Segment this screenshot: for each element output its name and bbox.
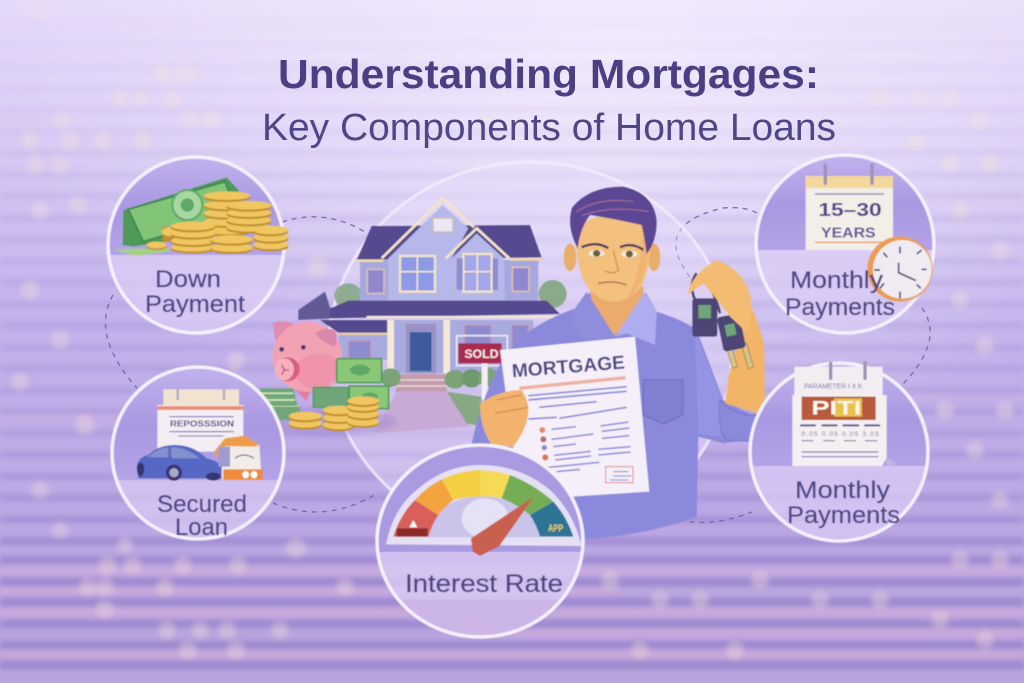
central circle (328, 162, 732, 542)
shop box (222, 436, 262, 479)
sold sign (457, 336, 507, 400)
gauge: APP (548, 524, 564, 535)
icon: PITI calendar (792, 363, 897, 466)
piggy bank and savings (257, 321, 397, 435)
hair (570, 187, 657, 254)
icon: PITI calendar: PARAMETER I 4 K (804, 381, 862, 390)
shirt (472, 293, 758, 539)
hand holding document (480, 390, 528, 447)
panel: Monthly Payments PITI (745, 360, 935, 541)
gauge (386, 465, 582, 556)
dashed connector arcs (105, 208, 930, 522)
circle (112, 367, 284, 539)
mortgage document (500, 337, 649, 500)
circle (756, 155, 934, 333)
panel: Monthly Payments PITI: Payments (787, 502, 900, 529)
circle (108, 157, 284, 333)
label: Down (155, 266, 221, 293)
mortgage document: MORTGAGE (511, 352, 626, 382)
panel: Down Payment (100, 150, 290, 333)
panel: Interest Rate (370, 440, 590, 640)
panel: Monthly Payments term (750, 150, 940, 333)
title: Understanding Mortgages: (278, 51, 819, 97)
icon: repossession notice, car and shop (137, 387, 263, 481)
label: Interest Rate (405, 570, 563, 598)
icon: cash and coins (113, 177, 288, 256)
rolled sleeve (719, 400, 767, 442)
needle (471, 497, 534, 556)
panel: Monthly Payments term: Payments (785, 294, 895, 321)
icon: calendar 15-30 years and clock: YEARS (821, 225, 876, 241)
neck (590, 287, 644, 336)
car (137, 445, 224, 478)
panel: central scene (257, 162, 767, 542)
icon: repossession notice, car and shop: REPOSSSION (170, 420, 234, 429)
man holding mortgage document and keys (472, 187, 767, 539)
subtitle: Key Components of Home Loans (262, 107, 836, 149)
ears and face (564, 243, 576, 271)
sold sign: SOLD (464, 347, 499, 361)
house (298, 198, 567, 433)
icon: calendar 15-30 years and clock: 15–30 (818, 199, 882, 220)
raised forearm (725, 310, 765, 415)
panel: Secured Loan (100, 360, 290, 541)
panel: Secured Loan: Loan (175, 514, 228, 541)
collar (572, 292, 615, 345)
panel: Down Payment: Payment (145, 291, 245, 318)
icon: PITI calendar: 0.05 0.05 0.05 3.05 (801, 431, 879, 438)
icon: calendar 15-30 years and clock (806, 165, 933, 302)
circle (750, 363, 928, 541)
icon: PITI calendar: PITI (811, 398, 861, 419)
label: Monthly (795, 477, 891, 504)
label: Secured (157, 491, 247, 518)
label: Monthly (790, 267, 884, 294)
circle (377, 445, 583, 637)
raised hand (687, 260, 751, 332)
facial features (582, 244, 643, 250)
keys (692, 273, 753, 369)
